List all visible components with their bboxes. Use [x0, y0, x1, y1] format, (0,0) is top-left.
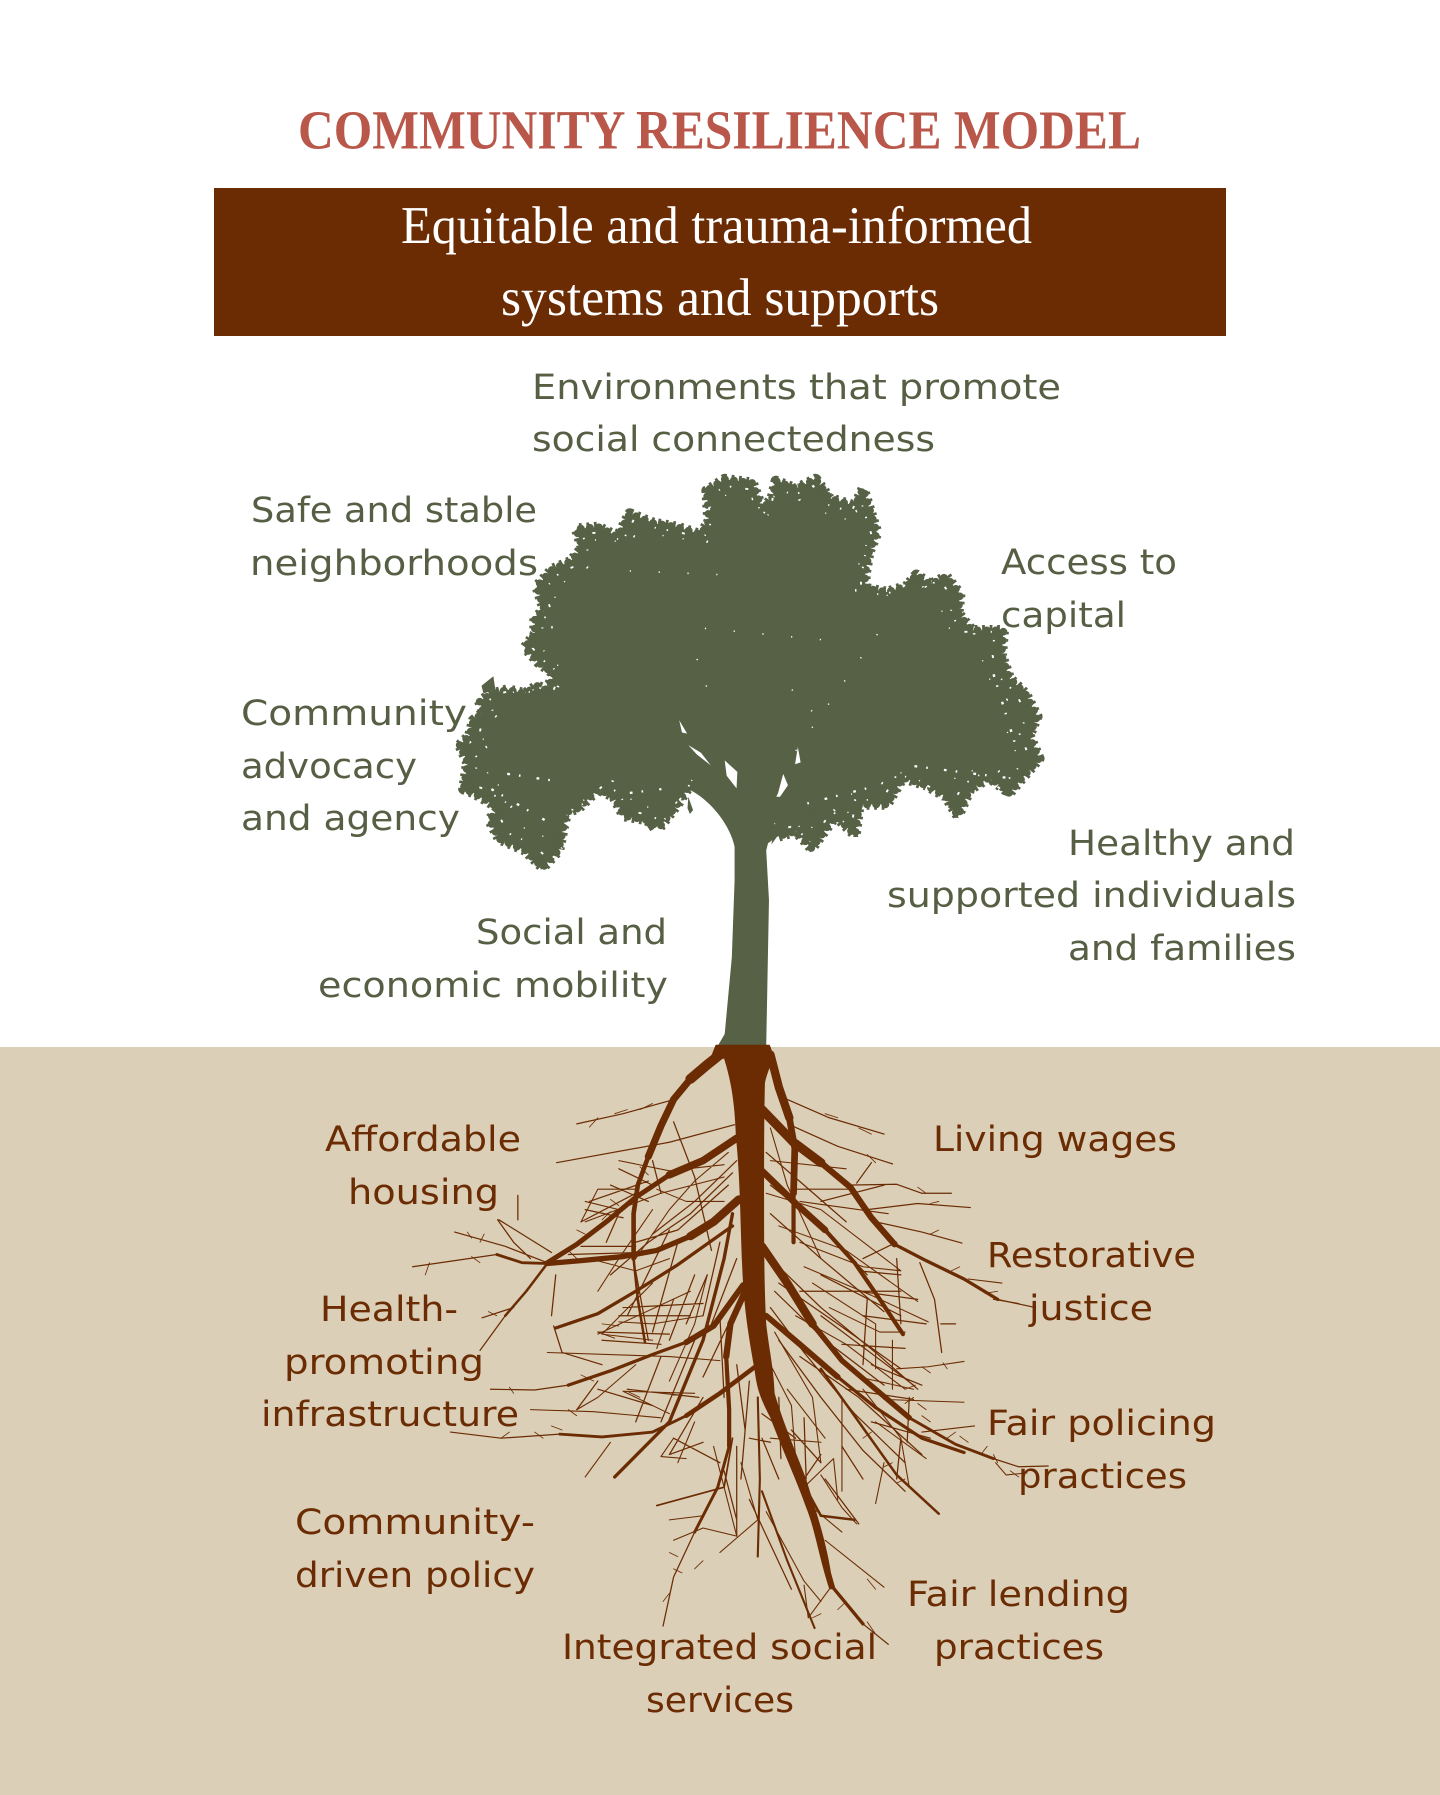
label: health-promoting infrastructure: promoting	[284, 1343, 484, 1383]
label: safe and stable neighborhoods: Safe and stable	[251, 491, 537, 531]
canopy leaf fringe	[460, 479, 1039, 868]
tap root	[709, 1045, 836, 1589]
banner: equitable and trauma-informed systems and supports: Equitable and trauma-informed	[401, 197, 1032, 255]
banner: equitable and trauma-informed systems and supports: systems and supports	[501, 269, 939, 327]
label: integrated social services: services	[646, 1681, 794, 1721]
label: fair policing practices	[987, 1404, 1216, 1497]
title: COMMUNITY RESILIENCE MODEL	[298, 100, 1141, 160]
label: community-driven policy: Community-	[295, 1503, 535, 1543]
banner: equitable and trauma-informed systems and supports	[214, 188, 1226, 336]
label: environments that promote social connectedness: social connectedness	[532, 420, 935, 460]
label: safe and stable neighborhoods: neighborhoods	[250, 544, 538, 584]
label: community advocacy and agency: Community	[241, 694, 467, 734]
label: fair lending practices: Fair lending	[907, 1575, 1130, 1615]
trunk	[687, 788, 780, 1046]
label: affordable housing	[325, 1120, 521, 1213]
label: access to capital	[1001, 543, 1177, 636]
label: community advocacy and agency: advocacy	[241, 747, 417, 787]
label: social and economic mobility: economic mobility	[318, 966, 668, 1006]
twigs	[425, 1103, 1019, 1634]
ground panel	[0, 1047, 1440, 1795]
label: health-promoting infrastructure	[261, 1290, 519, 1435]
label: healthy and supported individuals and families: Healthy and	[1068, 824, 1295, 864]
canopy speckled gaps	[470, 486, 1029, 861]
tree canopy and trunk	[460, 479, 1039, 1046]
label: living wages: Living wages	[933, 1120, 1177, 1160]
label: community-driven policy: driven policy	[295, 1556, 535, 1596]
label: fair lending practices: practices	[934, 1628, 1104, 1668]
label: social and economic mobility	[318, 913, 668, 1006]
label: safe and stable neighborhoods	[250, 491, 538, 584]
label: community advocacy and agency	[241, 694, 467, 839]
hanging leaves	[460, 676, 1009, 869]
label: fair lending practices	[907, 1575, 1130, 1668]
label: access to capital: Access to	[1001, 543, 1177, 583]
label: health-promoting infrastructure: infrastructure	[261, 1395, 519, 1435]
label: restorative justice: justice	[1028, 1289, 1153, 1329]
major roots	[690, 1051, 724, 1079]
roots	[413, 1045, 1048, 1644]
label: social and economic mobility: Social and	[476, 913, 667, 953]
label: health-promoting infrastructure: Health-	[320, 1290, 458, 1330]
label: affordable housing: Affordable	[325, 1120, 521, 1160]
label: fair policing practices: practices	[1018, 1457, 1187, 1497]
label: community advocacy and agency: and agency	[241, 799, 460, 839]
label: environments that promote social connectedness: Environments that promote	[532, 368, 1061, 408]
label: healthy and supported individuals and families: and families	[1068, 929, 1296, 969]
branch gaps	[679, 720, 801, 814]
label: affordable housing: housing	[348, 1173, 499, 1213]
fine rootlets	[455, 1099, 970, 1365]
label: environments that promote social connectedness	[532, 368, 1061, 460]
label: restorative justice	[987, 1236, 1196, 1329]
label: integrated social services	[562, 1628, 877, 1721]
label: community-driven policy	[295, 1503, 535, 1596]
label: fair policing practices: Fair policing	[987, 1404, 1216, 1444]
label: healthy and supported individuals and families: supported individuals	[887, 876, 1296, 916]
label: integrated social services: Integrated social	[562, 1628, 877, 1668]
label: access to capital: capital	[1001, 596, 1126, 636]
canopy silhouette	[460, 479, 1039, 868]
label: healthy and supported individuals and families	[887, 824, 1296, 969]
label: restorative justice: Restorative	[987, 1236, 1196, 1276]
